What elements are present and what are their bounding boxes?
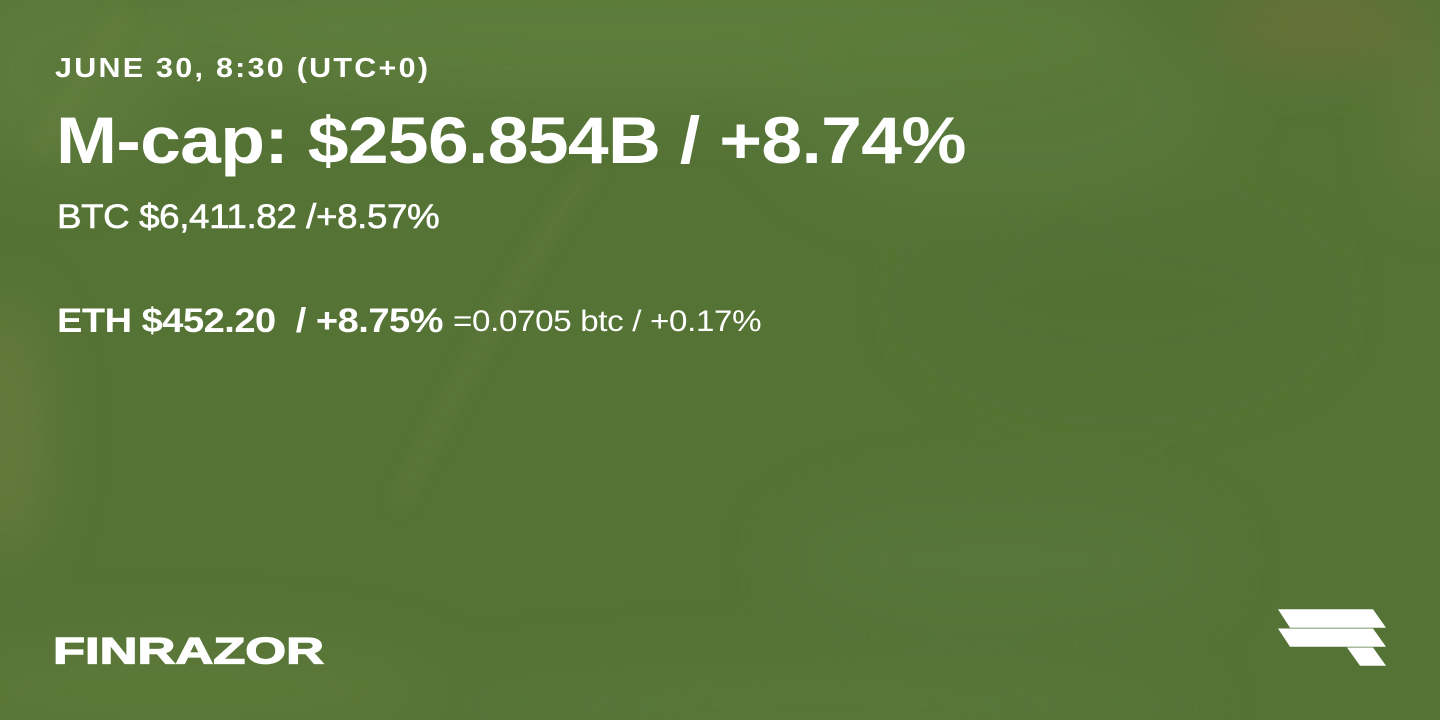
BTC price line: BTC $6,411.82 /+8.57%: [57, 198, 439, 236]
date heading: JUNE 30, 8:30 (UTC+0): [55, 52, 430, 83]
ETH price line: ETH $452.20 / +8.75%: [57, 302, 443, 340]
ETH price in BTC: =0.0705 btc / +0.17%: [453, 305, 761, 338]
icon: razor logo mark: [1278, 609, 1386, 666]
market cap headline: M-cap: $256.854B / +8.74%: [56, 103, 966, 177]
